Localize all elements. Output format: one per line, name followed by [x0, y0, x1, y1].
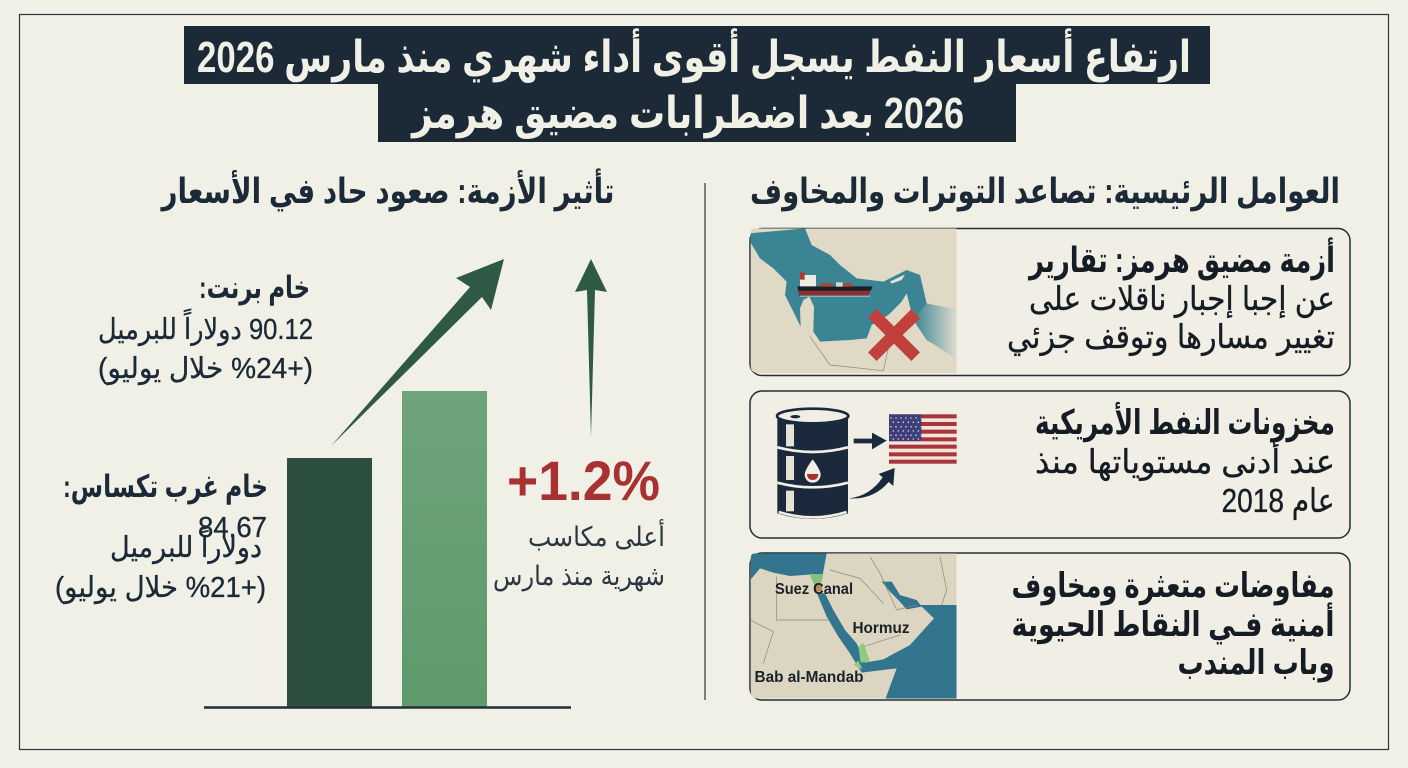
- label: WTI: خام غرب تكساس:: [63, 469, 268, 505]
- arrow: diagonal rise: [331, 259, 504, 446]
- map label: Bab al-Mandab: Bab al-Mandab: [754, 669, 864, 686]
- arrow: vertical rise: [575, 259, 607, 437]
- panel: US inventories: [750, 391, 1350, 538]
- label: Brent: 90.12 دولاراً للبرميل: [98, 309, 313, 346]
- text: US inventories: عام 2018: [1222, 482, 1334, 520]
- text: Hormuz crisis: [1007, 237, 1335, 356]
- bar: Brent: [402, 391, 487, 707]
- title: [184, 26, 1210, 142]
- label: WTI: (+21‏% خلال يوليو): [55, 572, 266, 604]
- title: 2026 بعد اضطرابات مضيق هرمز: [410, 89, 964, 139]
- label: WTI: دولاراً للبرميل: [110, 527, 262, 564]
- icon: arrows to flag: [849, 433, 895, 498]
- text: negotiations: وباب المندب: [1178, 644, 1334, 683]
- text: US inventories: عند أدنى مستوياتها منذ: [1035, 440, 1335, 481]
- panel: Hormuz crisis: [750, 225, 1350, 376]
- map: Red Sea and Gulf chokepoints: [750, 550, 957, 700]
- panel: negotiations and chokepoints: [750, 550, 1350, 700]
- text: US inventories: [1035, 401, 1335, 520]
- stat caption: [493, 518, 665, 592]
- text: Hormuz crisis: عن إجبا إجبار ناقلات على: [1029, 280, 1335, 319]
- icon: red cross: [868, 309, 920, 361]
- map label: Suez Canal: Suez Canal: [775, 581, 853, 598]
- text: negotiations: [1012, 567, 1334, 683]
- map label: Hormuz: Hormuz: [852, 620, 910, 637]
- icon: tanker: [797, 272, 873, 297]
- stat: +1.2%: +1.2%: [507, 449, 660, 512]
- label: Brent: (+24‏% خلال يوليو): [98, 353, 313, 385]
- icon: oil barrel: [777, 409, 848, 519]
- bar chart: [204, 391, 571, 708]
- heading: crisis impact: تأثير الأزمة: صعود حاد في الأسعار: [160, 168, 615, 212]
- title: ارتفاع أسعار النفط يسجل أقوى أداء شهري منذ مارس 2026: [197, 28, 1191, 83]
- label: Brent: [98, 270, 313, 385]
- text: negotiations: أمنية فـي النقاط الحيوية: [1012, 602, 1334, 645]
- label: WTI: [55, 469, 268, 604]
- label: Brent: خام برنت:: [199, 270, 310, 306]
- stat caption: شهرية منذ مارس: [493, 561, 665, 592]
- map: Strait of Hormuz with tanker and cross: [750, 225, 957, 375]
- text: Hormuz crisis: تغيير مسارها وتوقف جزئي: [1007, 318, 1335, 356]
- icon: US flag: [889, 414, 957, 464]
- stat caption: أعلى مكاسب: [528, 518, 665, 552]
- label: WTI: 84.67: [198, 512, 267, 544]
- bar: WTI: [287, 458, 372, 707]
